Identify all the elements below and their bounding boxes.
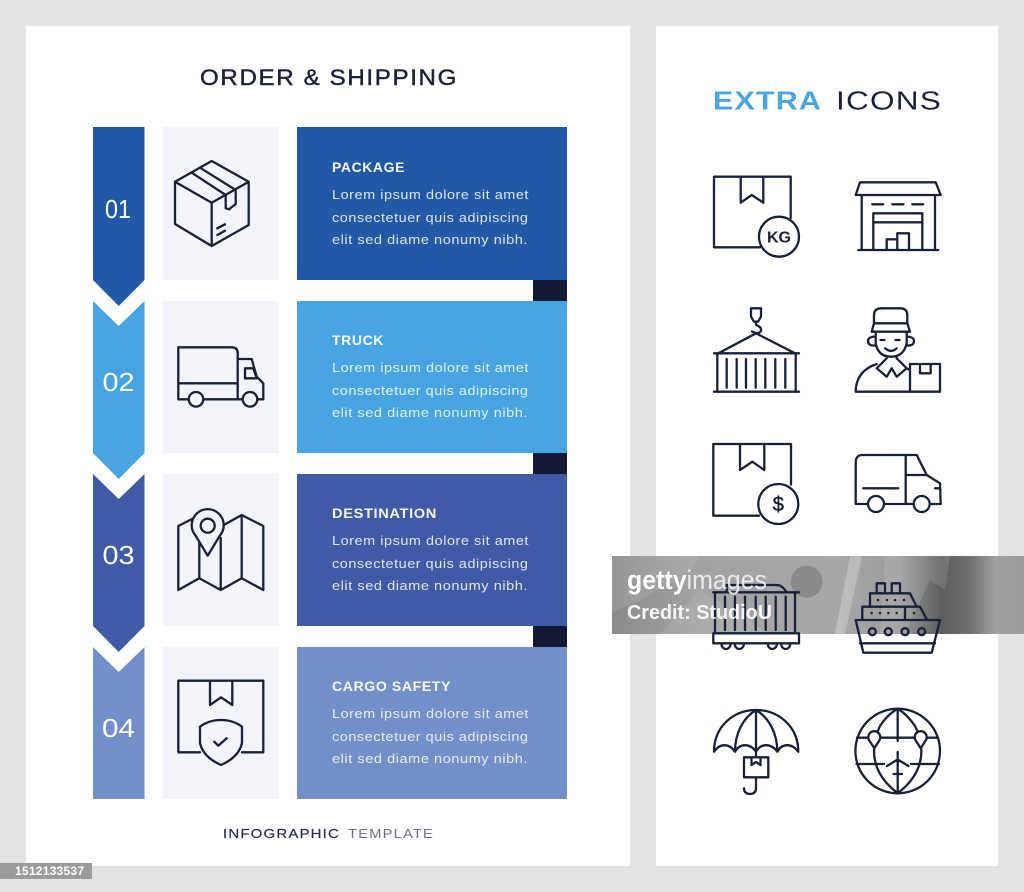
icon: cargo ship (856, 583, 940, 653)
icon: package price: $ (773, 494, 784, 516)
icon tile: truck (163, 301, 279, 453)
step 02 chevron: 02 (102, 367, 134, 397)
text panel: truck: TRUCK (332, 332, 384, 348)
watermark text (627, 565, 772, 624)
icon: global shipping (855, 709, 940, 793)
step 04 chevron: 04 (102, 713, 135, 743)
icon: container hoist (714, 308, 799, 392)
panel: order and shipping (26, 26, 630, 866)
connector block 1 (533, 280, 567, 301)
icon: package weight (714, 177, 799, 257)
text panel: package: elit sed diame nonumy nibh. (332, 232, 528, 247)
footer caption: INFOGRAPHIC (223, 826, 340, 841)
step 02 chevron (93, 301, 144, 479)
text panel: cargo safety: Lorem ipsum dolore sit amet (332, 706, 529, 721)
title: ORDER & SHIPPING (200, 65, 458, 90)
connector block 2 (533, 453, 567, 474)
text panel: cargo safety: elit sed diame nonumy nibh. (332, 751, 528, 766)
icon tile: package (163, 127, 279, 280)
heading (713, 86, 942, 116)
text panel: cargo safety: consectetuer quis adipiscing (332, 729, 528, 744)
text panel: cargo safety: CARGO SAFETY (332, 678, 451, 694)
footer caption (223, 826, 434, 841)
step 01 chevron: 01 (105, 194, 131, 224)
icon: package weight: KG (767, 230, 791, 246)
text panel: destination: Lorem ipsum dolore sit amet (332, 533, 529, 548)
text panel: cargo safety (297, 647, 567, 799)
watermark text: gettyimages (627, 565, 767, 595)
text panel: destination: DESTINATION (332, 505, 437, 521)
image id tag (0, 863, 92, 879)
heading: ICONS (836, 86, 942, 116)
step 04 chevron (93, 647, 144, 799)
text panel: truck: consectetuer quis adipiscing (332, 383, 528, 398)
icon: rail container (713, 585, 799, 649)
icon tile: cargo safety (163, 647, 279, 799)
text panel: package: Lorem ipsum dolore sit amet (332, 187, 529, 202)
step 03 chevron (93, 474, 144, 652)
step 01 chevron (93, 127, 144, 306)
icon: warehouse (856, 182, 941, 250)
text panel: truck: Lorem ipsum dolore sit amet (332, 360, 529, 375)
text panel: truck: elit sed diame nonumy nibh. (332, 405, 528, 420)
text panel: package: PACKAGE (332, 159, 405, 175)
heading: EXTRA (713, 86, 822, 116)
text panel: destination: elit sed diame nonumy nibh. (332, 578, 528, 593)
icon: delivery worker (856, 308, 940, 392)
step 03 chevron: 03 (102, 540, 134, 570)
connector block 3 (533, 626, 567, 647)
text panel: truck (297, 301, 567, 453)
icon tile: map (163, 474, 279, 626)
image id tag: 1512133537 (15, 864, 84, 878)
text panel: package: consectetuer quis adipiscing (332, 210, 528, 225)
text panel: package (297, 127, 567, 280)
icon: cargo insurance umbrella (714, 710, 798, 794)
icon: delivery van (856, 455, 941, 512)
panel: extra icons (612, 26, 1024, 866)
watermark text: Credit: StudioU (627, 602, 772, 624)
text panel: destination (297, 474, 567, 626)
text panel: destination: consectetuer quis adipiscing (332, 556, 528, 571)
icon: package price (713, 444, 798, 524)
footer caption: TEMPLATE (348, 826, 434, 841)
watermark band background (612, 556, 1024, 634)
